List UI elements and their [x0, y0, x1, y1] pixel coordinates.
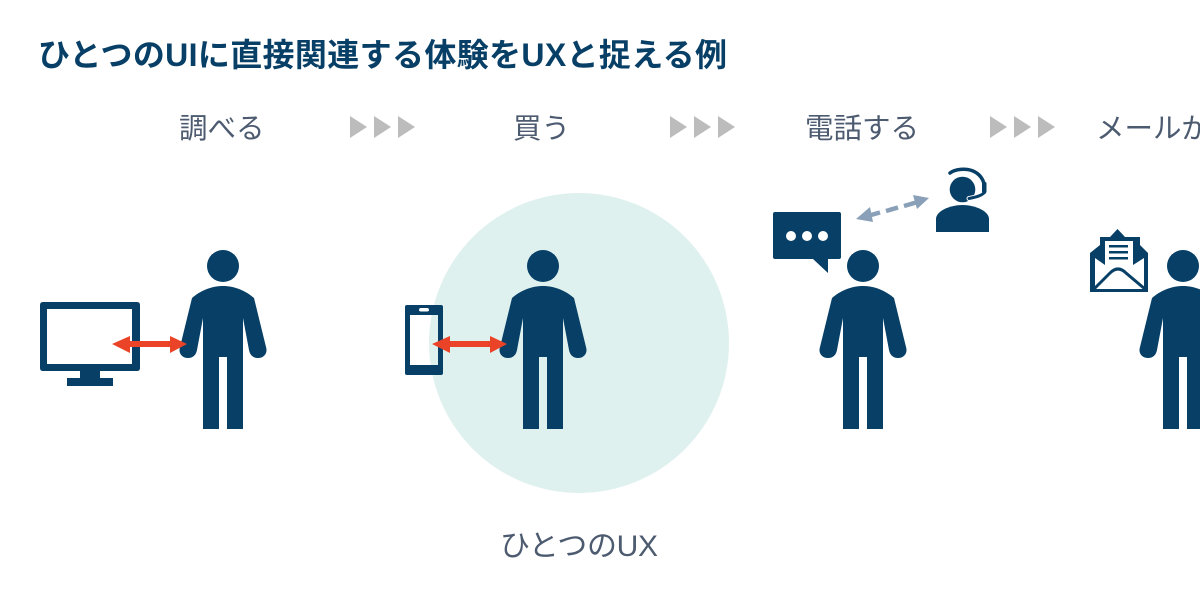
icon: open envelope [1090, 229, 1148, 292]
title: ひとつのUIに直接関連する体験をUXと捉える例 [38, 37, 727, 73]
icon: chat bubble [773, 212, 841, 273]
icon: call operator [936, 169, 989, 232]
highlight circle: one UX [429, 193, 729, 493]
person 1 [179, 250, 267, 429]
arrow: phone to person [432, 336, 507, 353]
step label: 電話する: 電話する [805, 113, 919, 145]
arrow: chevrons 3 [990, 116, 1055, 138]
person 3 [819, 250, 907, 429]
caption: ひとつのUX: ひとつのUX [500, 530, 658, 563]
step label: 調べる: 調べる [179, 113, 265, 145]
icon: monitor [40, 302, 140, 386]
person 4 [1139, 250, 1200, 429]
arrow: chevrons 1 [350, 116, 415, 138]
icon: smartphone [405, 305, 443, 375]
arrow: chevrons 2 [670, 116, 735, 138]
step label: 買う: 買う [513, 113, 570, 145]
arrow: monitor to person [112, 336, 187, 353]
arrow: dashed call line [856, 195, 929, 222]
person 2 [499, 250, 587, 429]
